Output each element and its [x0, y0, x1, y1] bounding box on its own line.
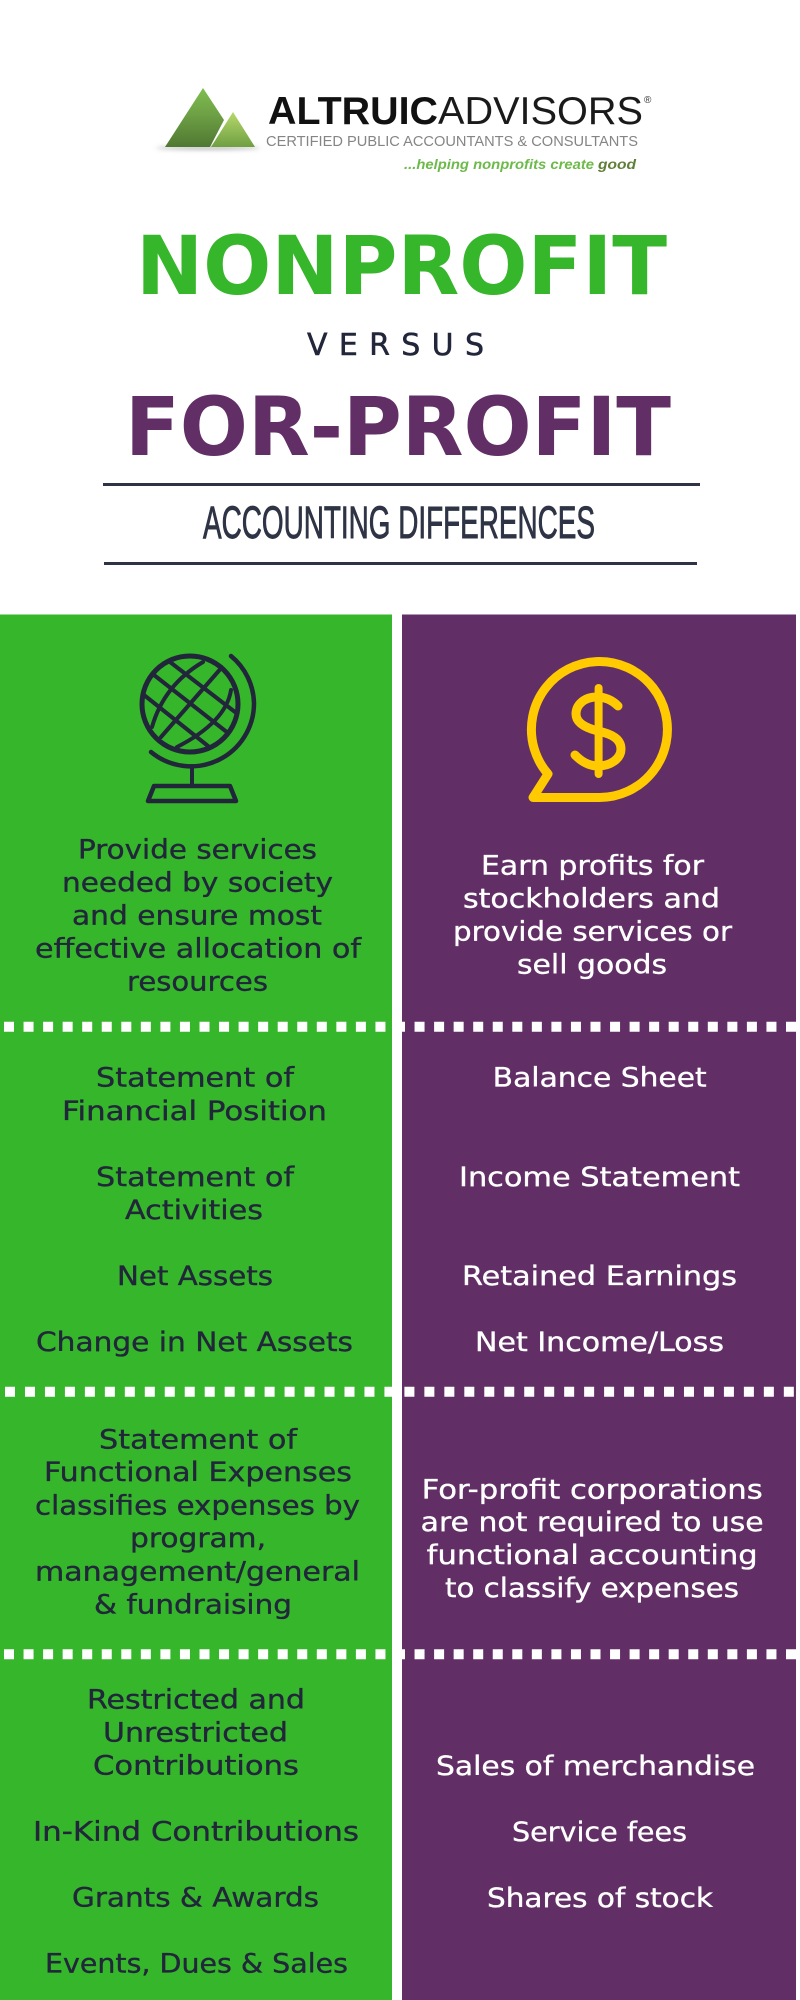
logo name: ADVISORS [438, 90, 643, 133]
text: nonprofit statements: Statement of [96, 1063, 295, 1094]
text: nonprofit functional expenses: program, [130, 1523, 266, 1554]
panel: for-profit column [402, 614, 796, 2000]
text: nonprofit functional expenses: Statement of [99, 1424, 298, 1455]
text: for-profit statements: Income Statement [459, 1162, 740, 1193]
panel: nonprofit column [0, 614, 392, 2000]
text: for-profit purpose: stockholders and [463, 883, 720, 914]
text: nonprofit purpose: effective allocation of [35, 933, 362, 964]
text: nonprofit statements: Net Assets [117, 1261, 273, 1292]
text: nonprofit purpose [35, 834, 362, 998]
logo mark: mountains [156, 88, 260, 150]
text: for-profit expenses note: functional accounting [427, 1540, 758, 1571]
logo name [268, 90, 652, 133]
text: for-profit statements: Retained Earnings [462, 1261, 737, 1292]
text: nonprofit statements [36, 1063, 353, 1358]
text: nonprofit revenue [33, 1684, 359, 1979]
text: nonprofit statements: Statement of [96, 1162, 295, 1193]
text: nonprofit functional expenses [35, 1424, 360, 1620]
text: nonprofit statements: Financial Position [62, 1096, 327, 1127]
text: nonprofit purpose: needed by society [62, 868, 333, 899]
title: FOR-PROFIT: FOR-PROFIT [125, 381, 671, 475]
text: for-profit revenue: Service fees [512, 1817, 687, 1848]
icon: dollar speech bubble [531, 662, 667, 798]
text: for-profit statements [459, 1063, 740, 1358]
text: for-profit expenses note: are not required to use [421, 1507, 764, 1538]
text: for-profit expenses note: For-profit corporations [422, 1474, 763, 1505]
text: for-profit statements: Net Income/Loss [475, 1327, 724, 1358]
text: nonprofit purpose: Provide services [78, 834, 317, 865]
text: nonprofit revenue: In-Kind Contributions [33, 1816, 359, 1847]
title: VERSUS: VERSUS [307, 328, 484, 363]
text: nonprofit statements: Change in Net Assets [36, 1327, 353, 1358]
text: for-profit statements: Balance Sheet [493, 1063, 707, 1094]
logo name: ALTRUIC [268, 90, 438, 133]
text: for-profit expenses note: to classify expenses [445, 1573, 739, 1604]
logo subtitle: CERTIFIED PUBLIC ACCOUNTANTS & CONSULTANTS [266, 134, 638, 150]
logo: Altruic Advisors [156, 88, 652, 172]
text: nonprofit functional expenses: classifies expenses by [35, 1490, 360, 1521]
text: nonprofit functional expenses: management/general [35, 1556, 360, 1587]
text: for-profit expenses note [421, 1474, 764, 1604]
text: for-profit purpose: sell goods [517, 949, 667, 980]
text: nonprofit purpose: and ensure most [72, 900, 322, 931]
text: for-profit purpose: Earn profits for [481, 850, 704, 881]
logo tagline: ...helping nonprofits create [404, 156, 594, 172]
text: for-profit revenue: Sales of merchandise [436, 1751, 755, 1782]
text: nonprofit revenue: Unrestricted [103, 1717, 288, 1748]
text: for-profit revenue [436, 1751, 755, 1914]
text: for-profit revenue: Shares of stock [487, 1883, 714, 1914]
title: NONPROFIT: NONPROFIT [136, 220, 667, 314]
text: nonprofit revenue: Events, Dues & Sales [45, 1948, 348, 1979]
text: nonprofit functional expenses: Functional Expenses [44, 1457, 352, 1488]
text: for-profit purpose [453, 850, 732, 980]
text: nonprofit functional expenses: & fundraising [94, 1589, 292, 1620]
text: nonprofit revenue: Contributions [93, 1750, 299, 1781]
text: for-profit purpose: provide services or [453, 916, 732, 947]
icon: globe [142, 656, 254, 801]
text: nonprofit statements: Activities [125, 1195, 263, 1226]
text: nonprofit revenue: Grants & Awards [72, 1882, 319, 1913]
logo tagline: good [597, 156, 636, 172]
text: nonprofit revenue: Restricted and [87, 1684, 305, 1715]
logo name: ® [644, 95, 652, 106]
text: nonprofit purpose: resources [127, 967, 268, 998]
